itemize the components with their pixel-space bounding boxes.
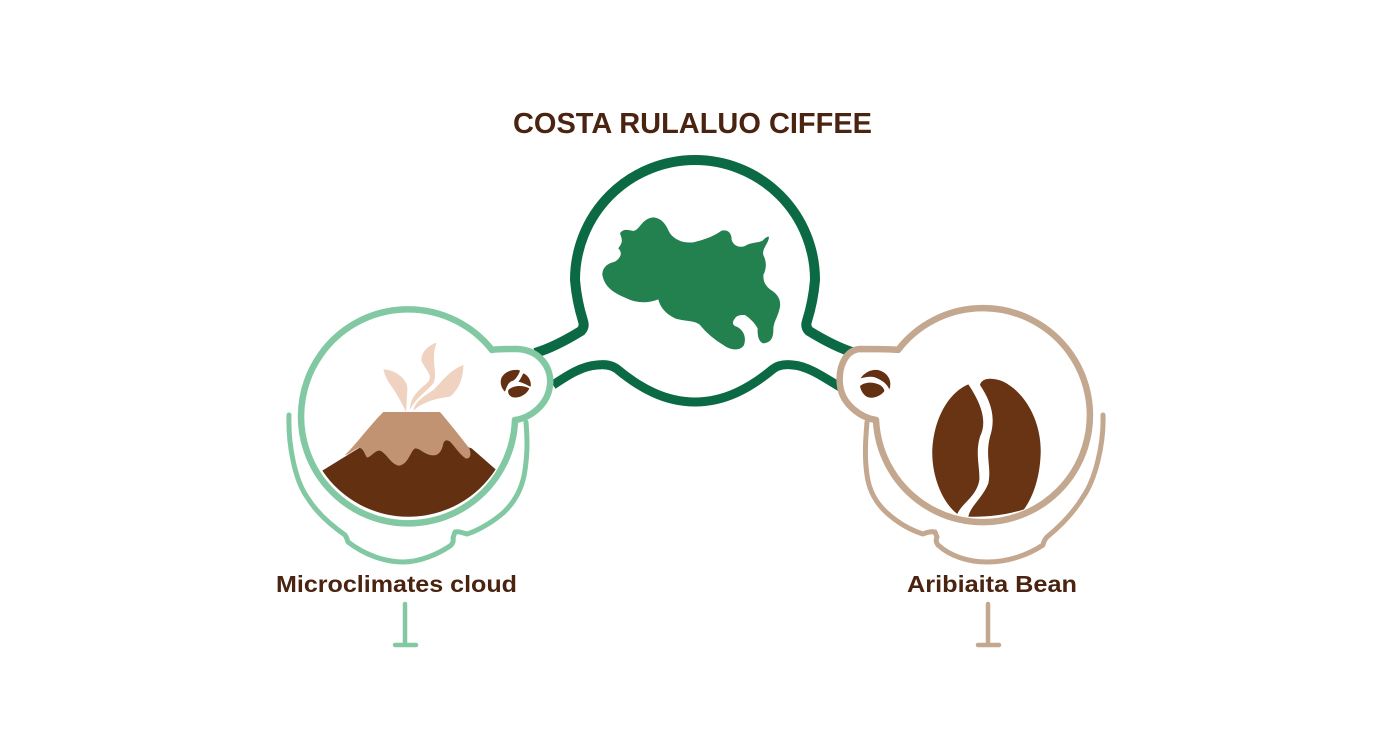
outer cradle outline [289, 415, 527, 562]
icon: small coffee bean [860, 370, 890, 398]
icon: volcano smoke [383, 343, 463, 412]
label: arabica bean: Aribiaita Bean [907, 571, 1077, 597]
lower connector [553, 365, 840, 402]
circle outline with bump [840, 308, 1090, 522]
panel: central map circle with connectors [535, 160, 855, 402]
icon: volcano [322, 412, 496, 517]
marker: right stem [978, 604, 999, 645]
panel: right coffee bean circle [840, 308, 1103, 562]
icon: large coffee bean [932, 379, 1041, 517]
upper connector and map circle outline [535, 160, 855, 353]
marker: left stem [395, 604, 416, 645]
title: COSTA RULALUO CIFFEE [513, 108, 872, 140]
panel: left volcano circle [289, 309, 550, 562]
label: microclimates: Microclimates cloud [276, 571, 517, 597]
icon: small coffee bean [501, 370, 531, 398]
circle outline with bump [301, 309, 550, 523]
map of Costa Rica [602, 217, 780, 349]
outer cradle outline [865, 415, 1103, 562]
